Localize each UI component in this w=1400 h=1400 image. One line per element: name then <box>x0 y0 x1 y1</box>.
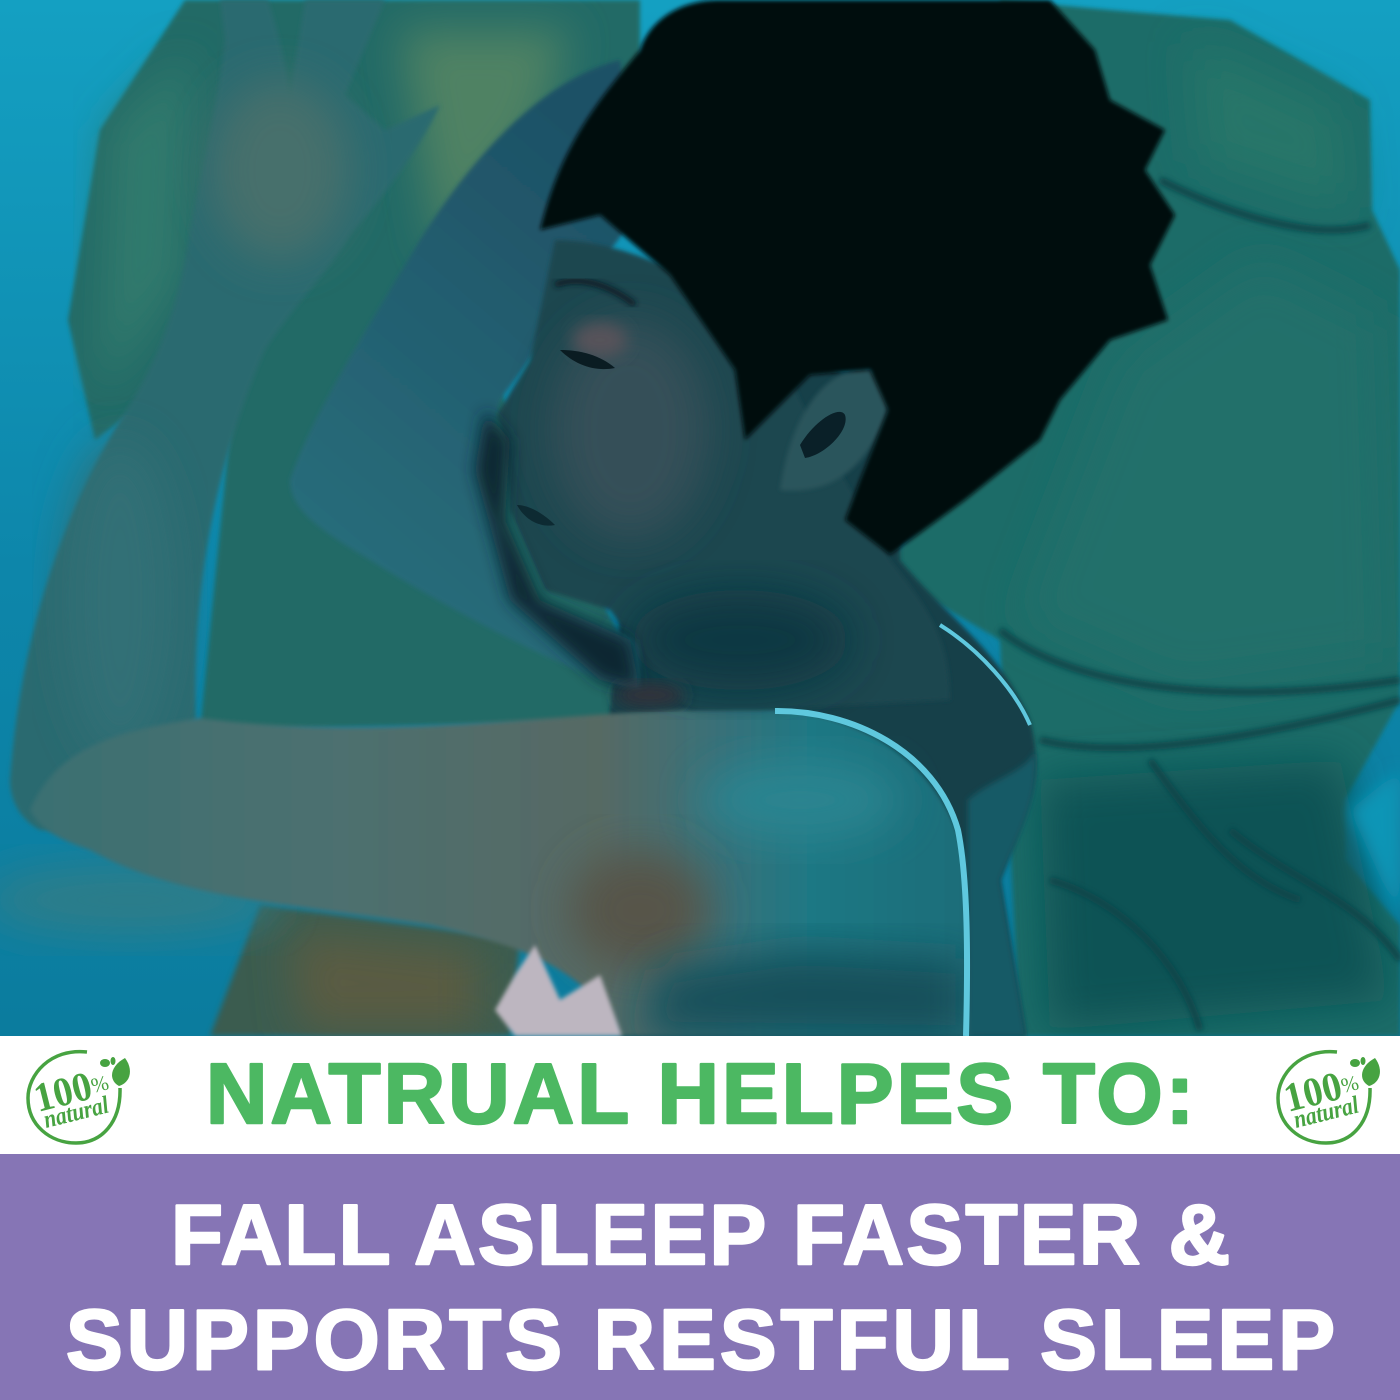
panel: purple benefit banner <box>0 1154 1400 1400</box>
face and neck <box>466 239 797 715</box>
pillow and green linen at right <box>880 0 1400 1036</box>
olive blanket around arms <box>68 0 660 1036</box>
white tank top fabric <box>495 945 622 1036</box>
ear <box>780 368 887 491</box>
heading: natrual helpes to: NATRUAL HELPES TO: <box>206 1047 1194 1142</box>
icon: 100% natural badge right: 100 <box>1279 1062 1346 1121</box>
icon: 100% natural badge left: 100 <box>29 1062 96 1121</box>
lower left soft shadow of arm on sheet <box>0 865 280 935</box>
body base shape filling the space under head and shoulder <box>608 370 1038 1036</box>
icon: 100% natural badge right: % <box>1338 1070 1361 1098</box>
panel: bedroom photo of woman sleeping <box>0 0 1400 1040</box>
panel: white heading bar <box>0 1036 1400 1154</box>
benefit line one: FALL ASLEEP FASTER & <box>171 1188 1230 1283</box>
forearm under the head <box>290 60 640 690</box>
icon: 100% natural badge right <box>1278 1052 1380 1143</box>
bed sheet background <box>0 0 1400 1036</box>
benefit line two: SUPPORTS RESTFUL SLEEP <box>66 1293 1335 1388</box>
upper arm and shoulder <box>30 708 1036 1040</box>
icon: 100% natural badge right: natural <box>1291 1092 1362 1134</box>
icon: 100% natural badge left: natural <box>41 1092 112 1134</box>
raised arm and hand <box>10 0 440 830</box>
icon: 100% natural badge left: % <box>88 1070 111 1098</box>
icon: 100% natural badge left <box>28 1052 130 1143</box>
hair <box>540 0 1175 555</box>
white straps of top <box>775 625 1030 1036</box>
